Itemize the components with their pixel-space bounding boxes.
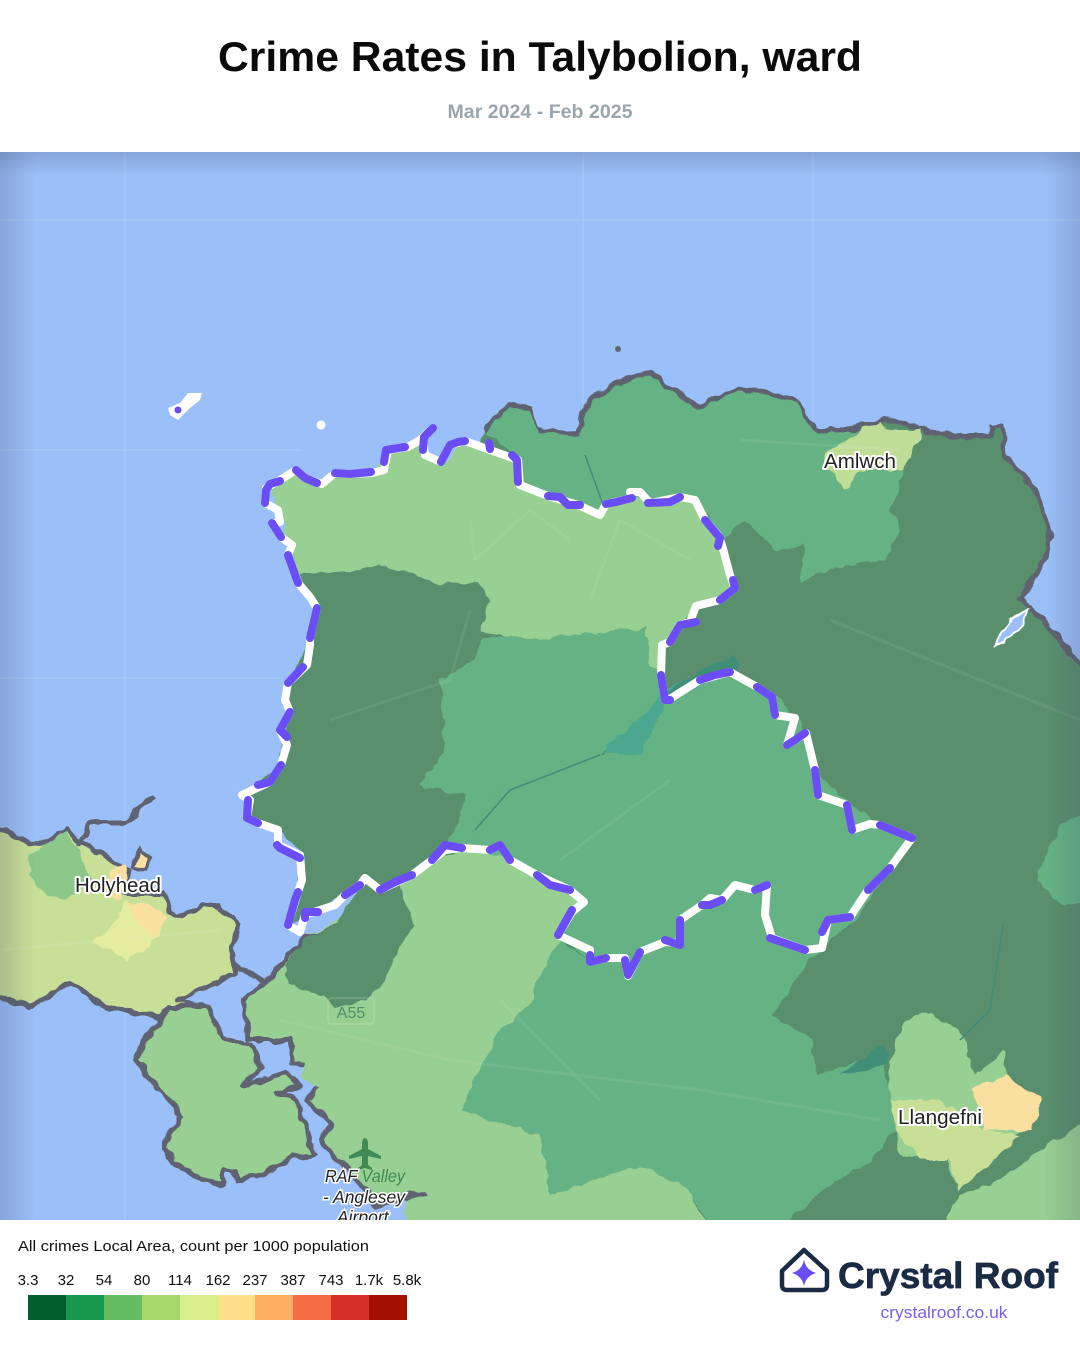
map edge shading [0,152,1080,1220]
label: RAF Valley - Anglesey Airport: - Anglesey [323,1187,406,1207]
icon: house with star [782,1250,827,1290]
region: east mid green patch [1037,812,1080,905]
legend values: 3.3 [18,1272,38,1289]
legend values: 387 [280,1272,306,1289]
islet marker [174,406,182,414]
land: south-west Anglesey [246,918,551,1220]
website: crystalroof.co.uk [880,1304,1008,1322]
ward outline: purple dashes [247,428,912,975]
river [475,455,1003,1040]
region: dark teal patch [838,1045,888,1075]
river valley patch [604,681,700,756]
river valley dark patch [665,657,738,700]
coastline: A55 bay [265,922,338,984]
Holyhead town: orange districts [108,862,128,900]
region: Amlwch [825,420,923,490]
icon: airport plane [349,1138,381,1170]
legend values: 162 [205,1272,231,1289]
legend values: 80 [134,1272,150,1289]
region: Llangefni pale north [888,1100,985,1160]
legend values: 1.7k [355,1272,384,1289]
subtitle: date range: Mar 2024 - Feb 2025 [448,102,633,123]
Holyhead town: peach district [125,902,168,938]
legend title: All crimes Local Area, count per 1000 population [18,1238,369,1255]
legend values: 32 [58,1272,74,1289]
land: Holyhead island [0,830,237,1017]
legend values: 237 [242,1272,268,1289]
region: south central light green [300,852,578,1088]
label: RAF Valley - Anglesey Airport: Airport [336,1207,390,1227]
region: Llangefni pale south [947,1130,1020,1190]
region: Llangefni light green [888,1012,1020,1190]
legend values: 54 [96,1272,112,1289]
region: south-east light green [946,1124,1080,1220]
Holyhead town: south pale [92,900,165,960]
legend values: 5.8k [393,1272,422,1289]
region: southern ward mid green [445,672,912,975]
label: Llangefni: Llangefni [898,1107,982,1129]
ward outline: white line [242,428,912,976]
region: south light green [539,1134,706,1220]
title: Crime Rates in Talybolion, ward [218,33,862,80]
coastline: south-west [232,963,427,1207]
legend colour scale [28,1295,407,1320]
land: Rhoscolyn peninsula [137,1007,315,1185]
label: Holyhead: Holyhead [75,875,161,897]
region: northern ward light green [268,430,735,670]
Holyhead town: mid green district [28,833,95,898]
legend values [18,1272,422,1289]
region: Llangefni yellow [970,1075,1042,1130]
label: Amlwch: Amlwch [824,451,896,473]
coastline: north and east [485,372,1080,672]
sea background [0,152,1080,1220]
road shield: A55: A55 [337,1005,365,1022]
region: A55 dark green [285,880,415,1010]
road shield: A55 [328,998,374,1024]
label: RAF Valley - Anglesey Airport [323,1166,406,1227]
legend values: 114 [168,1272,192,1289]
skerries islet [168,393,202,420]
land: north and east Anglesey base [400,372,1080,1240]
roads [330,438,1080,1121]
logo wordmark: Crystal Roof [838,1255,1059,1296]
legend [18,1238,422,1320]
small rock [615,346,621,352]
region: western ward dark green [245,563,490,925]
small harbour district [133,848,150,870]
region: north mid green [487,375,905,582]
inlet [995,608,1028,645]
Holyhead pier [78,795,155,846]
logo: Crystal Roof [782,1250,1059,1322]
region: central mid green [418,628,665,845]
small islet [316,420,326,430]
label: RAF Valley - Anglesey Airport: RAF Valley [325,1166,406,1186]
region: south mid green [460,885,895,1230]
land and region shapes [0,372,1080,1240]
legend values: 743 [318,1272,344,1289]
